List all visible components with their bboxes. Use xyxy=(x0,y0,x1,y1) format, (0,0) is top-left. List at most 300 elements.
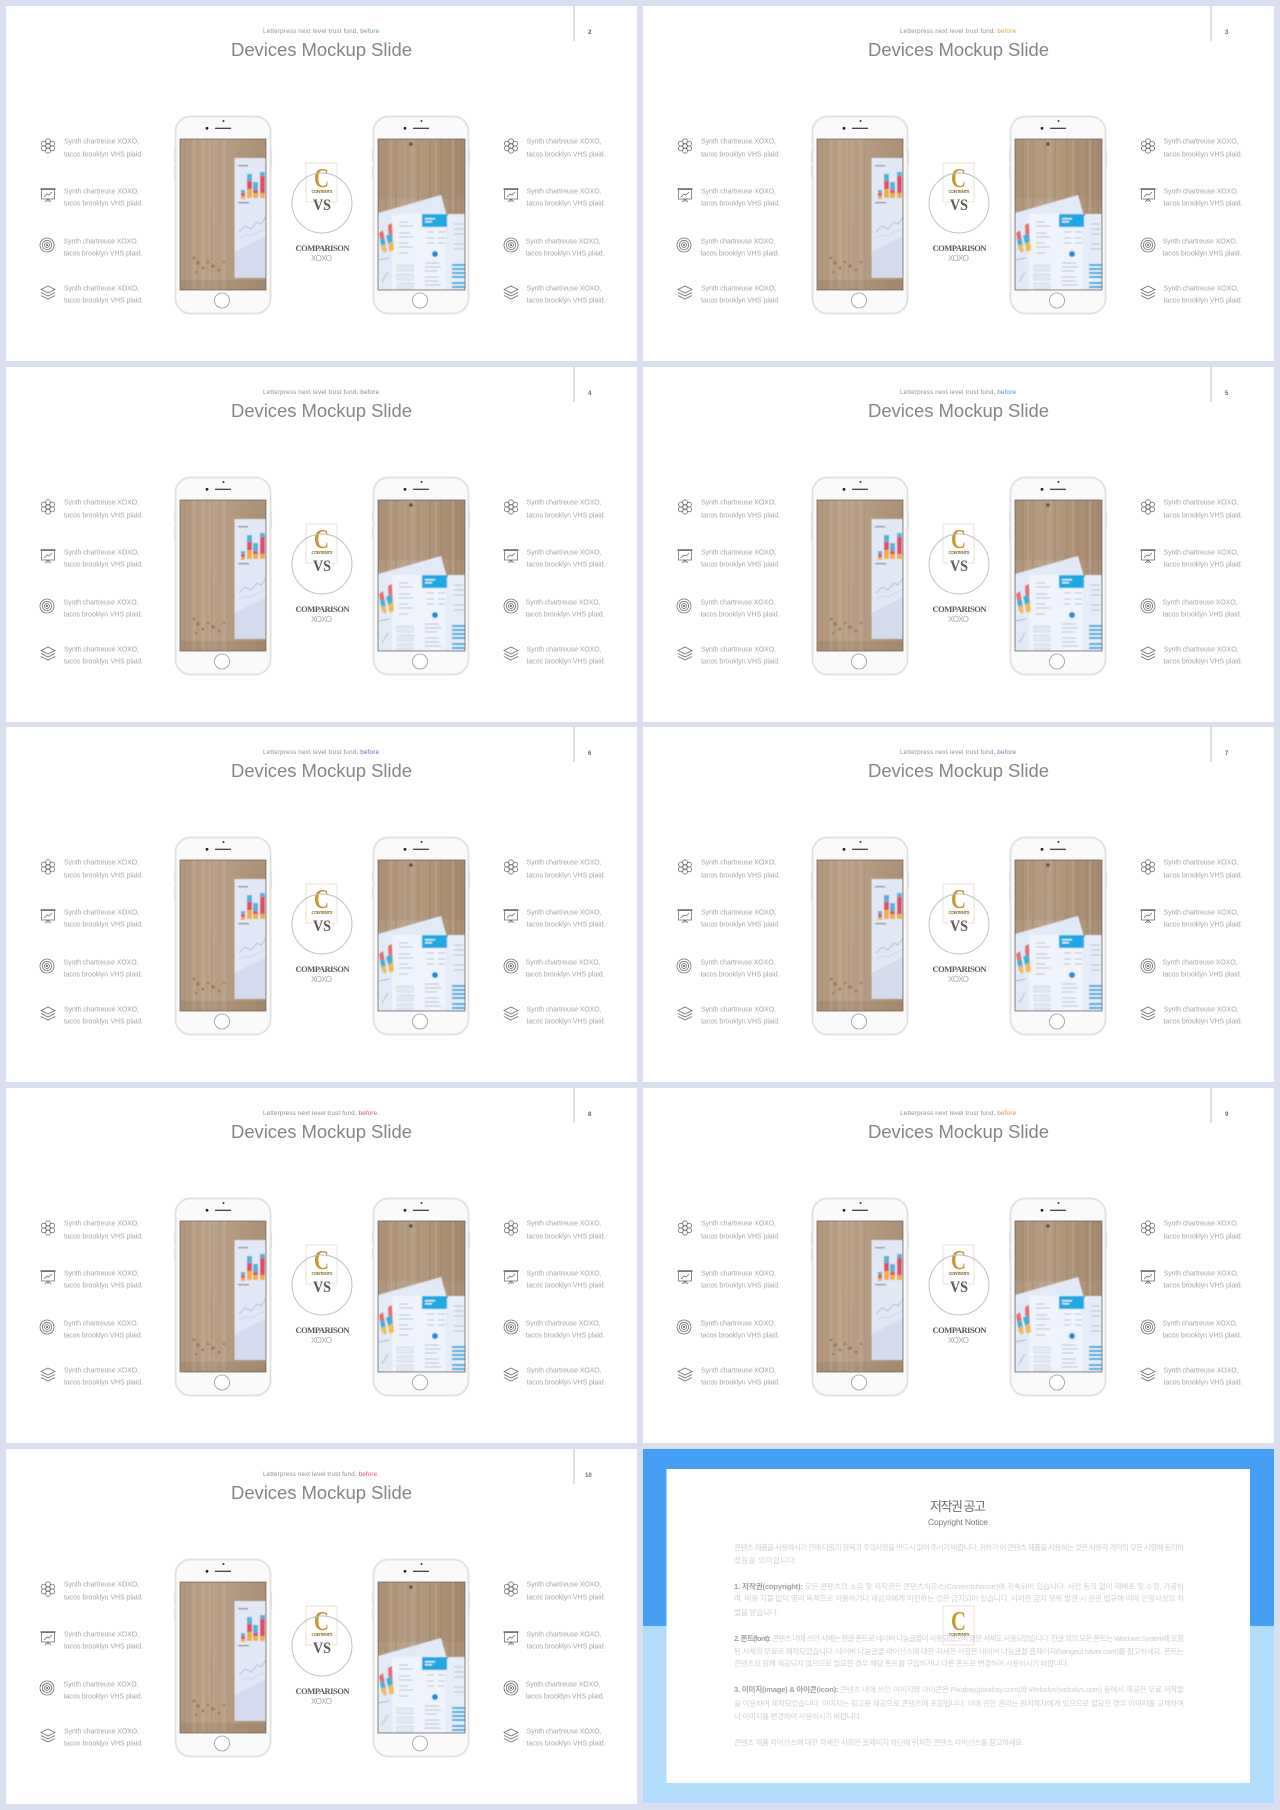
feature: atom icon left xyxy=(41,500,143,520)
feature: presentation icon left: tacos brooklyn VHS plaid. xyxy=(64,1644,143,1650)
feature: presentation icon left: Synth chartreuse XOXO, xyxy=(701,550,776,556)
VS badge: C xyxy=(314,884,329,914)
feature: layers icon left xyxy=(678,646,780,666)
VS badge: CONTENTS xyxy=(948,910,970,915)
feature: atom icon right xyxy=(504,1220,606,1240)
panel: copyright notice xyxy=(643,1449,1274,1803)
feature: target icon right: tacos brooklyn VHS plaid. xyxy=(526,1332,605,1340)
feature: atom icon right: tacos brooklyn VHS plaid. xyxy=(526,1594,606,1602)
page number xyxy=(1211,6,1229,41)
feature: target icon left xyxy=(677,599,780,618)
feature: atom icon left: tacos brooklyn VHS plaid. xyxy=(64,152,143,158)
comparison label: COMPARISON xyxy=(296,964,350,974)
panel: slide 9 xyxy=(643,1088,1274,1443)
feature: presentation icon right: Synth chartreuse XOXO, xyxy=(1164,910,1239,916)
subheading: Letterpress next level trust fund, before xyxy=(900,28,1016,35)
VS badge: C xyxy=(951,1245,966,1275)
VS badge: CONTENTS xyxy=(948,1271,970,1276)
feature: target icon right xyxy=(1141,959,1242,978)
feature: layers icon right xyxy=(504,1006,606,1026)
feature: presentation icon right: tacos brooklyn VHS plaid. xyxy=(526,1282,606,1290)
right phone mockup xyxy=(372,1198,470,1396)
feature: presentation icon right: tacos brooklyn VHS plaid. xyxy=(526,1644,606,1650)
feature: target icon right: Synth chartreuse XOXO, xyxy=(526,600,601,606)
VS badge: VS xyxy=(313,197,331,214)
feature: target icon right: Synth chartreuse XOXO, xyxy=(526,238,601,246)
feature: target icon right xyxy=(1141,238,1242,258)
feature: layers icon right: tacos brooklyn VHS plaid. xyxy=(526,658,606,666)
feature: layers icon right: Synth chartreuse XOXO, xyxy=(1164,1368,1239,1374)
comparison label xyxy=(296,1325,350,1345)
left phone mockup xyxy=(174,116,272,314)
feature: atom icon left xyxy=(41,860,143,880)
section: copyright: 며, 비용 지불 없이 영리 목적으로 이용하거나 제삼자에게 이전하는 것은 금지되어 있습니다. 이러한 금지 행위 발견 시 관련 법규에 따라 민형사상의 처 xyxy=(734,1593,1184,1603)
feature: presentation icon right: tacos brooklyn VHS plaid. xyxy=(526,922,606,928)
VS badge: CONTENTS xyxy=(312,910,332,915)
feature: presentation icon left: tacos brooklyn VHS plaid. xyxy=(64,1282,143,1290)
title: Devices Mockup Slide xyxy=(868,1121,1049,1142)
page number: 2 xyxy=(588,30,592,36)
comparison label: XOXO xyxy=(311,615,332,624)
feature: presentation icon left xyxy=(678,1270,780,1290)
feature: layers icon right: tacos brooklyn VHS plaid. xyxy=(526,1380,606,1386)
feature: presentation icon left xyxy=(40,1270,143,1290)
feature: target icon left: Synth chartreuse XOXO, xyxy=(64,600,139,606)
feature: atom icon right: Synth chartreuse XOXO, xyxy=(526,500,602,506)
feature: presentation icon right: Synth chartreuse XOXO, xyxy=(526,910,602,916)
comparison label xyxy=(932,243,987,263)
feature: target icon left: Synth chartreuse XOXO, xyxy=(700,960,776,966)
feature: presentation icon left: Synth chartreuse XOXO, xyxy=(701,1270,776,1278)
comparison label: COMPARISON xyxy=(932,243,987,253)
feature: atom icon right: Synth chartreuse XOXO, xyxy=(526,138,602,146)
subheading: Letterpress next level trust fund, before xyxy=(900,389,1016,396)
feature: presentation icon left xyxy=(678,188,780,208)
comparison label: XOXO xyxy=(948,1336,969,1345)
feature: presentation icon left: Synth chartreuse XOXO, xyxy=(64,910,139,916)
feature: layers icon left xyxy=(678,1368,780,1386)
feature: presentation icon right xyxy=(1140,1270,1243,1290)
feature: target icon left: tacos brooklyn VHS plaid. xyxy=(64,250,143,258)
feature: layers icon right: tacos brooklyn VHS plaid. xyxy=(526,1018,606,1026)
feature: presentation icon right: Synth chartreuse XOXO, xyxy=(526,1270,602,1278)
feature: target icon left xyxy=(677,238,780,258)
feature: target icon right: Synth chartreuse XOXO, xyxy=(1162,600,1238,606)
feature: atom icon right: Synth chartreuse XOXO, xyxy=(526,1582,602,1588)
feature: target icon right xyxy=(1141,599,1242,618)
title: Devices Mockup Slide xyxy=(231,1482,412,1503)
feature: layers icon right: Synth chartreuse XOXO, xyxy=(526,646,602,654)
subheading: Letterpress next level trust fund, before. xyxy=(263,1110,379,1117)
feature: target icon right xyxy=(504,599,605,618)
feature: target icon left: Synth chartreuse XOXO, xyxy=(64,1682,139,1688)
feature: atom icon right: Synth chartreuse XOXO, xyxy=(1164,860,1239,866)
comparison label: XOXO xyxy=(948,615,969,624)
feature: presentation icon left: Synth chartreuse XOXO, xyxy=(64,1270,139,1278)
feature: atom icon left: Synth chartreuse XOXO, xyxy=(701,1220,776,1228)
feature: layers icon right: Synth chartreuse XOXO, xyxy=(526,1728,602,1736)
feature: layers icon right: tacos brooklyn VHS plaid. xyxy=(526,1740,606,1748)
feature: atom icon right xyxy=(1141,860,1243,880)
feature: atom icon right: tacos brooklyn VHS plaid. xyxy=(1164,1234,1243,1240)
feature: layers icon left: tacos brooklyn VHS plaid. xyxy=(701,658,780,666)
title: Devices Mockup Slide xyxy=(231,39,412,60)
feature: presentation icon right xyxy=(504,550,606,568)
feature: layers icon right: Synth chartreuse XOXO, xyxy=(526,1368,602,1374)
feature: presentation icon left xyxy=(40,188,143,208)
page number: 8 xyxy=(588,1112,592,1118)
feature: target icon left: tacos brooklyn VHS plaid. xyxy=(700,250,780,258)
feature: atom icon left xyxy=(41,138,143,158)
feature: atom icon right: Synth chartreuse XOXO, xyxy=(1164,138,1239,146)
comparison label: XOXO xyxy=(311,975,332,984)
title: Devices Mockup Slide xyxy=(231,760,412,781)
feature: layers icon left xyxy=(678,286,780,304)
feature: layers icon left: Synth chartreuse XOXO, xyxy=(701,1006,776,1014)
section: font: 2. 폰트(font): 콘텐츠 내에 쓰인 서체는 한글 폰트로 네이버 나눔글꼴이 사용되었으며 영문 서체도 사용되었습니다. 한글 외의 모든 폰트는 Windows System에 포함 xyxy=(734,1633,1184,1643)
feature: atom icon left xyxy=(41,1582,143,1602)
page number: 5 xyxy=(1225,391,1229,397)
subheading: Letterpress next level trust fund, before xyxy=(263,749,379,756)
feature: layers icon right: tacos brooklyn VHS plaid. xyxy=(1164,1380,1243,1386)
feature: presentation icon right: Synth chartreuse XOXO, xyxy=(1164,188,1239,196)
feature: layers icon left xyxy=(678,1006,780,1026)
right phone mockup xyxy=(372,1560,470,1756)
feature: target icon left: Synth chartreuse XOXO, xyxy=(700,1320,776,1328)
subheading: Letterpress next level trust fund, before xyxy=(263,389,379,396)
feature: atom icon left: tacos brooklyn VHS plaid. xyxy=(701,872,780,880)
feature: presentation icon left: tacos brooklyn VHS plaid. xyxy=(701,562,780,568)
VS badge: C xyxy=(951,524,966,554)
page number: 7 xyxy=(1225,751,1229,757)
feature: target icon left xyxy=(40,599,143,618)
feature: target icon left xyxy=(40,1320,143,1340)
feature: atom icon left: Synth chartreuse XOXO, xyxy=(64,1220,139,1228)
feature: target icon left: tacos brooklyn VHS plaid. xyxy=(700,1332,780,1340)
feature: presentation icon right: tacos brooklyn VHS plaid. xyxy=(1164,200,1243,208)
closing note: 콘텐츠 제품 라이선스에 대한 자세한 사항은 홈페이지 하단에 위치한 콘텐츠 라이선스를 참고하세요. xyxy=(734,1737,1024,1747)
VS badge xyxy=(292,163,352,233)
panel: slide 2 xyxy=(6,6,637,361)
page number xyxy=(1211,727,1229,762)
feature: target icon left xyxy=(677,959,780,978)
page number: 6 xyxy=(588,751,592,757)
feature: layers icon right xyxy=(1141,1368,1243,1386)
right phone mockup xyxy=(372,116,470,314)
feature: atom icon right: tacos brooklyn VHS plaid. xyxy=(1164,512,1243,520)
intro paragraph: 콘텐츠 제품을 사용하시기 전에 다음의 항목과 주의사항을 반드시 읽어 주시기 바랍니다. 귀하가 이 콘텐츠 제품을 사용하는 것은 사용자 계약의 모든 사항에 동의하 xyxy=(734,1542,1184,1552)
feature: target icon right: tacos brooklyn VHS plaid. xyxy=(526,250,605,258)
feature: presentation icon left: Synth chartreuse XOXO, xyxy=(64,1632,139,1638)
feature: atom icon left: tacos brooklyn VHS plaid. xyxy=(701,1234,780,1240)
VS badge: VS xyxy=(313,918,331,935)
feature: presentation icon left xyxy=(678,550,780,568)
feature: atom icon left: tacos brooklyn VHS plaid. xyxy=(64,512,143,520)
feature: presentation icon right: tacos brooklyn VHS plaid. xyxy=(1164,1282,1243,1290)
feature: layers icon right: Synth chartreuse XOXO, xyxy=(1164,1006,1239,1014)
feature: atom icon right: tacos brooklyn VHS plaid. xyxy=(526,872,606,880)
comparison label: COMPARISON xyxy=(932,1325,987,1335)
panel: slide 3 xyxy=(643,6,1274,361)
feature: layers icon left: Synth chartreuse XOXO, xyxy=(64,1368,139,1374)
intro paragraph xyxy=(734,1542,1184,1565)
feature: target icon right: tacos brooklyn VHS plaid. xyxy=(526,612,605,618)
VS badge: CONTENTS xyxy=(312,1632,332,1637)
left phone mockup xyxy=(812,116,908,314)
feature: target icon right: Synth chartreuse XOXO, xyxy=(1162,1320,1238,1328)
feature: layers icon right: Synth chartreuse XOXO, xyxy=(526,286,602,292)
feature: presentation icon right xyxy=(1140,550,1243,568)
title: Devices Mockup Slide xyxy=(868,400,1049,421)
feature: layers icon left: Synth chartreuse XOXO, xyxy=(701,646,776,654)
feature: atom icon right: tacos brooklyn VHS plaid. xyxy=(1164,152,1243,158)
feature: layers icon left xyxy=(41,286,143,304)
feature: target icon left: tacos brooklyn VHS plaid. xyxy=(700,972,780,978)
feature: target icon left xyxy=(40,959,143,978)
feature: layers icon left: tacos brooklyn VHS plaid. xyxy=(64,298,143,304)
VS badge: CONTENTS xyxy=(312,189,332,194)
feature: layers icon right xyxy=(1141,1006,1243,1026)
feature: presentation icon left xyxy=(678,910,780,928)
feature: target icon left: Synth chartreuse XOXO, xyxy=(700,238,776,246)
feature: layers icon right: tacos brooklyn VHS plaid. xyxy=(1164,658,1243,666)
feature: atom icon right: Synth chartreuse XOXO, xyxy=(1164,500,1239,506)
feature: presentation icon left xyxy=(40,1632,143,1650)
subheading: Letterpress next level trust fund, before xyxy=(263,28,379,35)
VS badge: CONTENTS xyxy=(948,189,970,194)
panel: slide 10 xyxy=(6,1449,637,1804)
feature: layers icon left: tacos brooklyn VHS plaid. xyxy=(64,1018,143,1026)
feature: layers icon left: tacos brooklyn VHS plaid. xyxy=(64,1380,143,1386)
feature: layers icon left: Synth chartreuse XOXO, xyxy=(64,646,139,654)
comparison label xyxy=(296,604,350,624)
feature: target icon left: tacos brooklyn VHS plaid. xyxy=(64,1694,143,1700)
feature: target icon right: Synth chartreuse XOXO, xyxy=(526,1682,601,1688)
feature: presentation icon right xyxy=(504,1270,606,1290)
feature: presentation icon right: tacos brooklyn VHS plaid. xyxy=(1164,922,1243,928)
feature: target icon left: Synth chartreuse XOXO, xyxy=(64,1320,139,1328)
feature: target icon left: Synth chartreuse XOXO, xyxy=(64,238,139,246)
VS badge: CONTENTS xyxy=(312,1271,332,1276)
feature: atom icon left xyxy=(678,138,780,158)
right phone mockup xyxy=(1010,478,1106,674)
VS badge: C xyxy=(314,524,329,554)
feature: layers icon left xyxy=(41,1368,143,1386)
feature: presentation icon left xyxy=(40,910,143,928)
page number xyxy=(574,1449,592,1484)
section: image and icon: 을 이용하여 제작되었습니다. 이미지는 참고용 제공으로 콘텐츠에 포함됩니다. 이에 관한 권리는 원저작자에게 있으므로 필요한 경우 이미지를 교체하여 xyxy=(734,1698,1184,1708)
right phone mockup xyxy=(1010,1198,1106,1396)
page number xyxy=(574,367,592,402)
feature: atom icon left: Synth chartreuse XOXO, xyxy=(64,500,139,506)
feature: target icon right: tacos brooklyn VHS plaid. xyxy=(1162,1332,1242,1340)
section: copyright: 벌을 받습니다. xyxy=(734,1607,779,1617)
title: Devices Mockup Slide xyxy=(868,39,1049,60)
page number: 10 xyxy=(585,1473,592,1479)
feature: layers icon right xyxy=(1141,286,1243,304)
section: copyright xyxy=(734,1581,1184,1617)
feature: presentation icon right: tacos brooklyn VHS plaid. xyxy=(526,562,606,568)
feature: atom icon right xyxy=(504,138,606,158)
feature: presentation icon left: tacos brooklyn VHS plaid. xyxy=(64,562,143,568)
logo watermark: CONTENTS xyxy=(948,1632,970,1637)
comparison label: COMPARISON xyxy=(296,1686,350,1696)
section: font xyxy=(734,1633,1184,1668)
feature: layers icon right: Synth chartreuse XOXO, xyxy=(1164,646,1239,654)
feature: presentation icon left: tacos brooklyn VHS plaid. xyxy=(701,1282,780,1290)
feature: atom icon left xyxy=(678,500,780,520)
VS badge: VS xyxy=(313,558,331,575)
feature: target icon left: tacos brooklyn VHS plaid. xyxy=(64,612,143,618)
VS badge: C xyxy=(951,163,966,193)
feature: presentation icon right: tacos brooklyn VHS plaid. xyxy=(1164,562,1243,568)
feature: presentation icon left: tacos brooklyn VHS plaid. xyxy=(701,200,780,208)
title: Devices Mockup Slide xyxy=(868,760,1049,781)
feature: atom icon left: Synth chartreuse XOXO, xyxy=(64,860,139,866)
VS badge xyxy=(292,1606,352,1676)
page number xyxy=(1211,367,1229,402)
VS badge: CONTENTS xyxy=(312,550,332,555)
right phone mockup xyxy=(1010,838,1106,1034)
feature: presentation icon left: tacos brooklyn VHS plaid. xyxy=(64,200,143,208)
feature: layers icon right xyxy=(1141,646,1243,666)
VS badge: VS xyxy=(950,197,968,214)
section: font: 된 서체와 무료로 제작되었습니다. 네이버 나눔글꼴 라이선스에 대한 자세한 사항은 네이버 나눔글꼴 홈페이지(hangeul.naver.com)를 참고하세요. 폰트는 xyxy=(734,1646,1184,1656)
feature: target icon right: Synth chartreuse XOXO, xyxy=(1162,238,1238,246)
left phone mockup xyxy=(174,478,272,674)
right phone mockup xyxy=(372,478,470,674)
page number xyxy=(574,727,592,762)
comparison label: XOXO xyxy=(311,254,332,263)
VS badge: VS xyxy=(950,1279,968,1296)
feature: layers icon left: Synth chartreuse XOXO, xyxy=(64,1006,139,1014)
feature: presentation icon left xyxy=(40,550,143,568)
feature: atom icon right: Synth chartreuse XOXO, xyxy=(1164,1220,1239,1228)
panel: slide 7 xyxy=(643,727,1274,1082)
feature: layers icon right: Synth chartreuse XOXO, xyxy=(526,1006,602,1014)
feature: atom icon left: Synth chartreuse XOXO, xyxy=(701,138,776,146)
feature: atom icon left: Synth chartreuse XOXO, xyxy=(64,1582,139,1588)
comparison label: COMPARISON xyxy=(296,243,350,253)
comparison label xyxy=(296,1686,350,1706)
notice subheading: Copyright Notice xyxy=(928,1517,988,1527)
feature: target icon left xyxy=(677,1320,780,1340)
page number: 9 xyxy=(1225,1112,1229,1118)
VS badge: C xyxy=(951,884,966,914)
feature: presentation icon right: Synth chartreuse XOXO, xyxy=(526,188,602,196)
feature: atom icon right: Synth chartreuse XOXO, xyxy=(526,860,602,866)
panel: slide 4 xyxy=(6,367,637,722)
feature: layers icon left: tacos brooklyn VHS plaid. xyxy=(701,1018,780,1026)
panel: slide 6 xyxy=(6,727,637,1082)
comparison label xyxy=(932,1325,987,1345)
intro paragraph: 셨음을 의미합니다. xyxy=(734,1555,797,1565)
feature: layers icon right xyxy=(504,286,606,304)
feature: layers icon left: tacos brooklyn VHS plaid. xyxy=(701,1380,780,1386)
feature: atom icon right xyxy=(1141,138,1243,158)
feature: layers icon right xyxy=(504,646,606,666)
feature: target icon right: tacos brooklyn VHS plaid. xyxy=(1162,612,1242,618)
feature: presentation icon right xyxy=(504,1632,606,1650)
feature: atom icon left xyxy=(41,1220,143,1240)
feature: presentation icon left: Synth chartreuse XOXO, xyxy=(701,188,776,196)
comparison label: COMPARISON xyxy=(932,604,987,614)
feature: atom icon left xyxy=(678,1220,780,1240)
feature: presentation icon right xyxy=(1140,188,1243,208)
section: image and icon: 3. 이미지(image) & 아이콘(icon): 콘텐츠 내에 쓰인 이미지와 아이콘은 Pixabay(pixabay.com)와 Webalys(webalys.com) 등에서 제공한 무료 저작물 xyxy=(734,1684,1184,1694)
feature: layers icon right: Synth chartreuse XOXO, xyxy=(1164,286,1239,292)
feature: layers icon left: tacos brooklyn VHS plaid. xyxy=(701,298,780,304)
page number xyxy=(1211,1088,1229,1123)
right phone mockup xyxy=(1010,116,1106,314)
feature: target icon right xyxy=(504,1320,605,1340)
feature: atom icon right xyxy=(1141,500,1243,520)
feature: target icon left: tacos brooklyn VHS plaid. xyxy=(64,972,143,978)
feature: presentation icon right xyxy=(504,188,606,208)
feature: presentation icon left: Synth chartreuse XOXO, xyxy=(64,550,139,556)
feature: atom icon left: Synth chartreuse XOXO, xyxy=(701,500,776,506)
feature: target icon right: tacos brooklyn VHS plaid. xyxy=(526,972,605,978)
feature: layers icon right xyxy=(504,1368,606,1386)
comparison label: XOXO xyxy=(311,1336,332,1345)
feature: target icon right: tacos brooklyn VHS plaid. xyxy=(1162,250,1242,258)
feature: target icon right: tacos brooklyn VHS plaid. xyxy=(526,1694,605,1700)
feature: target icon right: Synth chartreuse XOXO, xyxy=(526,1320,601,1328)
feature: presentation icon left: Synth chartreuse XOXO, xyxy=(701,910,776,916)
subheading: Letterpress next level trust fund, before xyxy=(900,749,1016,756)
VS badge: C xyxy=(314,1606,329,1636)
feature: atom icon left: tacos brooklyn VHS plaid. xyxy=(64,1594,143,1602)
feature: layers icon left: tacos brooklyn VHS plaid. xyxy=(64,1740,143,1748)
feature: presentation icon right xyxy=(1140,910,1243,928)
left phone mockup xyxy=(812,838,908,1034)
feature: layers icon left xyxy=(41,1728,143,1748)
comparison label: XOXO xyxy=(948,254,969,263)
logo watermark xyxy=(943,1606,974,1645)
feature: target icon left: Synth chartreuse XOXO, xyxy=(700,600,776,606)
feature: presentation icon right: Synth chartreuse XOXO, xyxy=(1164,550,1239,556)
VS badge: C xyxy=(314,163,329,193)
feature: layers icon right xyxy=(504,1728,606,1748)
panel: slide 8 xyxy=(6,1088,637,1443)
VS badge xyxy=(929,524,989,594)
title: Devices Mockup Slide xyxy=(231,400,412,421)
feature: atom icon right: tacos brooklyn VHS plaid. xyxy=(526,152,606,158)
feature: atom icon left: Synth chartreuse XOXO, xyxy=(64,138,139,146)
comparison label: XOXO xyxy=(948,975,969,984)
feature: target icon right xyxy=(504,959,605,978)
feature: target icon left: tacos brooklyn VHS plaid. xyxy=(64,1332,143,1340)
comparison label: COMPARISON xyxy=(296,1325,350,1335)
feature: target icon right xyxy=(504,238,605,258)
feature: atom icon right: tacos brooklyn VHS plaid. xyxy=(1164,872,1243,880)
feature: layers icon right: tacos brooklyn VHS plaid. xyxy=(526,298,606,304)
left phone mockup xyxy=(174,838,272,1034)
feature: layers icon left: tacos brooklyn VHS plaid. xyxy=(64,658,143,666)
subheading: Letterpress next level trust fund, before. xyxy=(263,1471,379,1478)
comparison label xyxy=(932,604,987,624)
feature: presentation icon right: Synth chartreuse XOXO, xyxy=(1164,1270,1239,1278)
feature: target icon left: Synth chartreuse XOXO, xyxy=(64,960,139,966)
section: copyright: 1. 저작권(copyright): 모든 콘텐츠의 소유 및 저작권은 콘텐츠하우스(Contentshouse)에 귀속되어 있습니다. 사전 동의 없이 재배포 및 수정, 가공하 xyxy=(734,1581,1184,1591)
left phone mockup xyxy=(174,1198,272,1396)
right phone mockup xyxy=(372,838,470,1034)
feature: layers icon left xyxy=(41,646,143,666)
feature: atom icon left xyxy=(678,860,780,880)
left phone mockup xyxy=(812,1198,908,1396)
feature: atom icon right xyxy=(1141,1220,1243,1240)
left phone mockup xyxy=(812,478,908,674)
